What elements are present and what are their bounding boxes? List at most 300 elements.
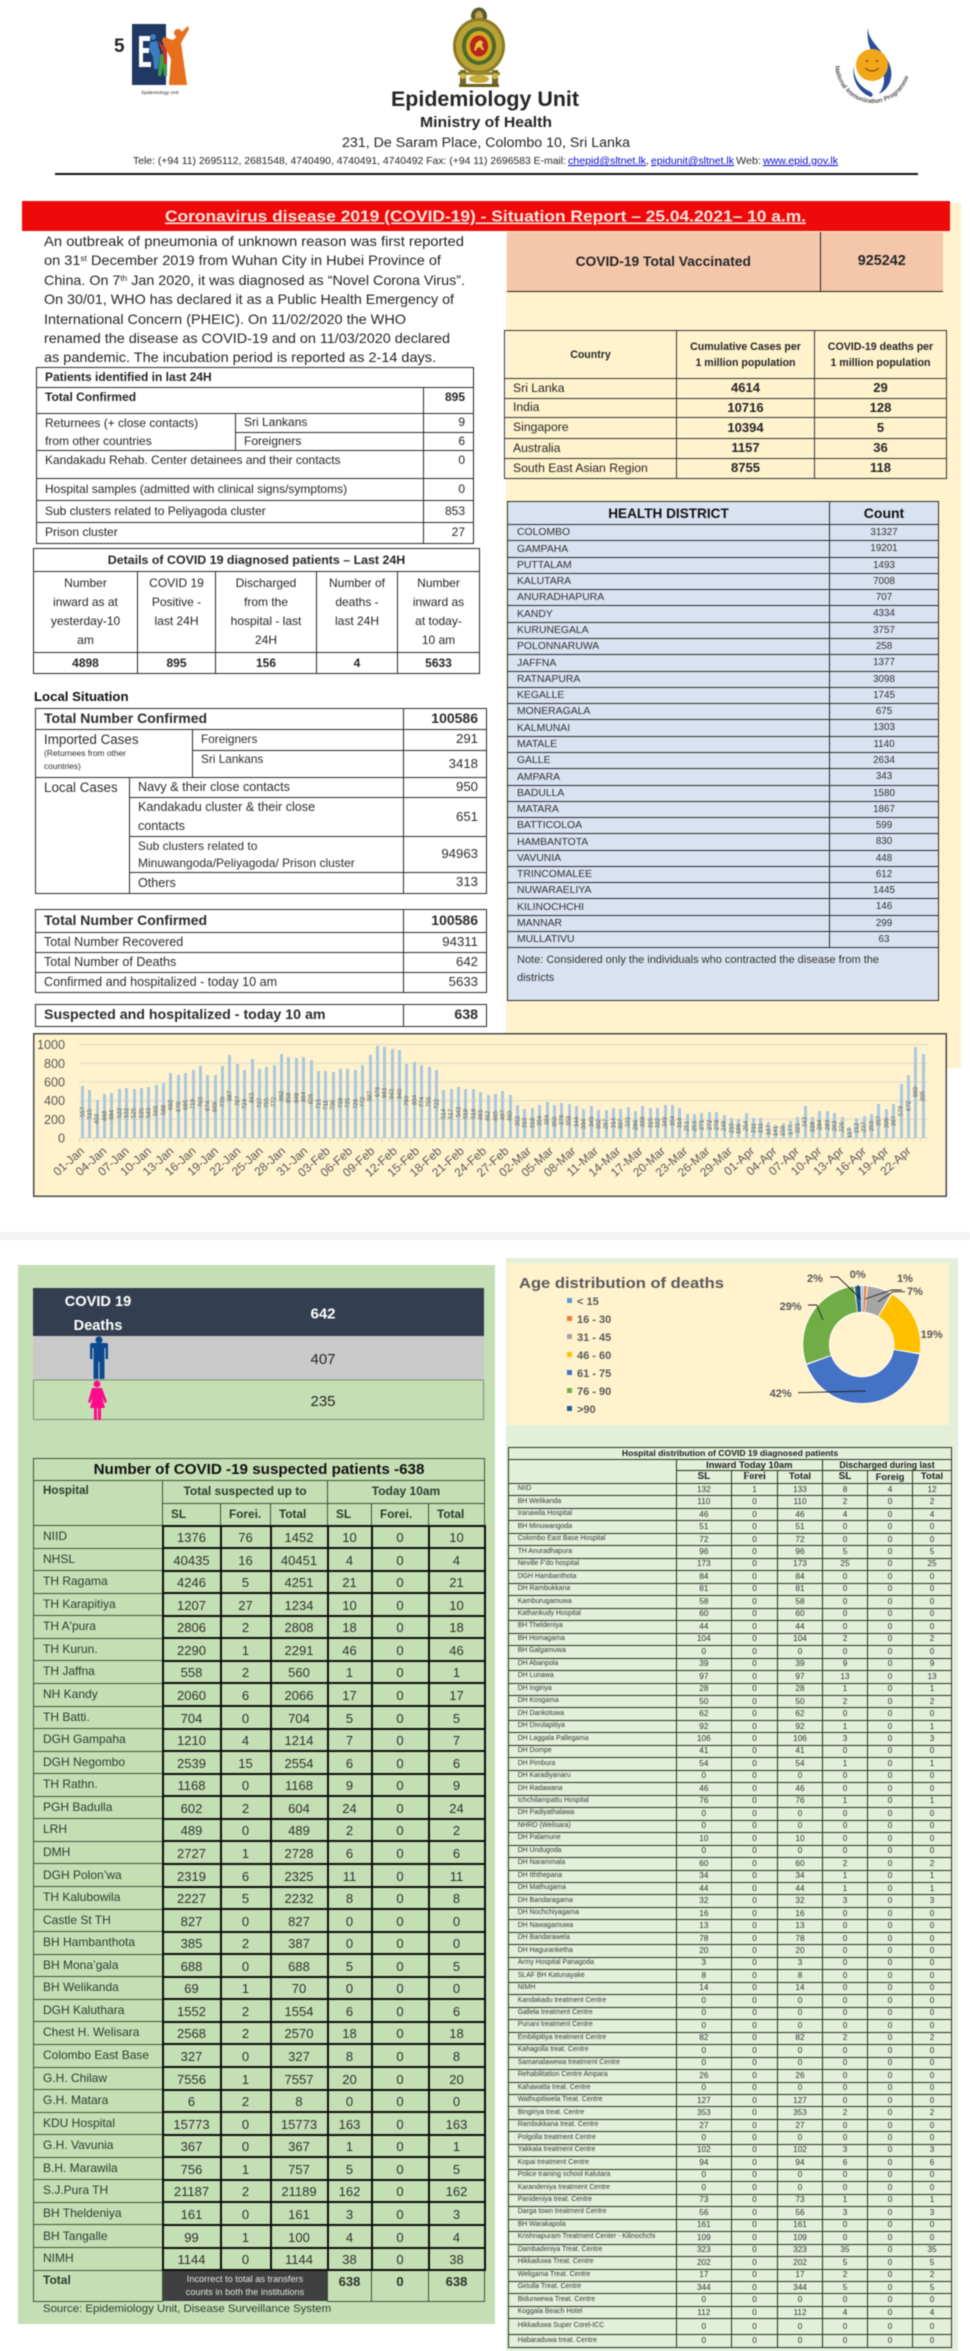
table: country comparison per million: 5 xyxy=(877,420,884,435)
table: hospital distribution of diagnosed patients: 13 xyxy=(699,1921,708,1930)
table: hospital distribution of diagnosed patients: 0 xyxy=(843,1846,847,1855)
table: hospital distribution of diagnosed patients: 0 xyxy=(843,1534,847,1544)
table: hospital distribution of diagnosed patients: 0 xyxy=(702,1647,706,1656)
table: number of suspected patients: NH Kandy xyxy=(43,1687,98,1701)
table: country comparison per million: COVID-19 deaths per xyxy=(828,340,933,352)
table: hospital distribution of diagnosed patients: 44 xyxy=(699,1622,708,1631)
table: number of suspected patients: 40435 xyxy=(173,1553,210,1568)
x axis date labels: 19-Apr xyxy=(855,1144,891,1178)
table: number of suspected patients: 0 xyxy=(242,2252,249,2267)
table: hospital distribution of diagnosed patients: Kamburugamuwa xyxy=(518,1598,572,1604)
table: hospital distribution of diagnosed patients: 2 xyxy=(930,2270,934,2279)
table: number of suspected patients: Forei. xyxy=(229,1507,261,1521)
table: hospital distribution of diagnosed patients: 0 xyxy=(843,1746,847,1755)
table: health district counts: 343 xyxy=(876,771,892,782)
table: local situation breakdown xyxy=(34,707,488,895)
table: hospital distribution of diagnosed patients: SL xyxy=(839,1471,851,1482)
table: local situation breakdown: Total Number Confirmed xyxy=(44,710,207,726)
bars with data labels: 159 xyxy=(780,1125,787,1136)
table: hospital distribution of diagnosed patients: 0 xyxy=(888,2158,892,2167)
table: number of suspected patients: 6 xyxy=(346,2004,353,2019)
table: country comparison per million: 1 million population xyxy=(830,356,931,368)
table: hospital distribution of diagnosed patients: 8 xyxy=(798,1971,802,1980)
table: country comparison per million: 1157 xyxy=(731,440,760,455)
table: hospital distribution of diagnosed patients: 0 xyxy=(843,1597,847,1606)
table: hospital distribution of diagnosed patients: 35 xyxy=(840,2245,850,2254)
table: hospital distribution of diagnosed patients: 0 xyxy=(888,2133,892,2142)
x axis date labels: 09-Feb xyxy=(340,1144,378,1180)
panel: pale green background right column xyxy=(506,1258,958,2351)
table: details of COVID 19 diagnosed patients: yesterday-10 xyxy=(51,614,120,628)
table: hospital distribution of diagnosed patients: 0 xyxy=(752,1672,757,1681)
x axis date labels: 07-Jan xyxy=(95,1144,132,1179)
table: number of suspected patients: 0 xyxy=(242,2139,249,2154)
table: hospital distribution of diagnosed patients: 0 xyxy=(930,2170,934,2179)
table: totals summary: 5633 xyxy=(449,974,478,989)
bars with data labels: 284 xyxy=(817,1119,824,1130)
table: hospital distribution of diagnosed patients: 0 xyxy=(752,1697,757,1706)
table: hospital distribution of diagnosed patients: 0 xyxy=(930,2058,934,2067)
table: number of suspected patients: 163 xyxy=(446,2117,467,2132)
table: totals summary: 100586 xyxy=(431,912,478,928)
table: hospital distribution of diagnosed patients: 0 xyxy=(930,2233,934,2242)
table: hospital distribution of diagnosed patients: 0 xyxy=(888,2245,892,2254)
donut leader lines xyxy=(798,1277,905,1393)
table: hospital distribution of diagnosed patients: 76 xyxy=(795,1796,805,1805)
table: number of suspected patients: 40451 xyxy=(281,1553,317,1568)
bars with data labels: 887 xyxy=(227,1091,234,1101)
table: hospital distribution of diagnosed patients: 2 xyxy=(930,1497,934,1506)
y axis labels xyxy=(37,1038,65,1146)
table: hospital distribution of diagnosed patients: 97 xyxy=(699,1672,708,1681)
table: hospital distribution of diagnosed patients: 102 xyxy=(697,2145,711,2154)
x axis date labels xyxy=(50,1144,914,1180)
table: hospital distribution of diagnosed patients: DH Lunawa xyxy=(518,1672,554,1679)
table: hospital distribution of diagnosed patients: 0 xyxy=(888,1759,892,1768)
table: details of COVID 19 diagnosed patients: 156 xyxy=(256,656,276,670)
heading: Epidemiology Unit: Epidemiology Unit xyxy=(391,88,579,111)
table: hospital distribution of diagnosed patients: 0 xyxy=(888,1834,892,1843)
bars with data labels: 672 xyxy=(905,1101,912,1112)
table: hospital distribution of diagnosed patients: Hikkaduwa Super Corel-ICC xyxy=(518,2322,604,2329)
table: hospital distribution of diagnosed patients: 0 xyxy=(798,2322,802,2331)
table: hospital distribution of diagnosed patients: 0 xyxy=(752,1572,757,1581)
table: hospital distribution of diagnosed patients: 0 xyxy=(843,1834,847,1843)
table: number of suspected patients: 0 xyxy=(242,1778,249,1793)
table: number of suspected patients: 9 xyxy=(346,1778,353,1793)
table: hospital distribution of diagnosed patients: 17 xyxy=(795,2270,805,2279)
bars with data labels: 350 xyxy=(551,1116,558,1127)
table: hospital distribution of diagnosed patients: 1 xyxy=(930,1871,934,1880)
table: hospital distribution of diagnosed patients: Embilipitiya treatment Centre xyxy=(518,2034,606,2041)
bars with data labels: 715 xyxy=(315,1099,322,1110)
x axis date labels: 02-Mar xyxy=(496,1144,534,1180)
bars with data labels: 514 xyxy=(441,1109,448,1119)
table: hospital distribution of diagnosed patients: 110 xyxy=(793,1497,807,1506)
table: hospital distribution of diagnosed patients: 0 xyxy=(930,2046,934,2055)
table: hospital distribution of diagnosed patients: 0 xyxy=(702,2021,706,2030)
table: patients identified in last 24H: 9 xyxy=(458,415,465,429)
x axis date labels: 05-Mar xyxy=(518,1144,556,1180)
table: hospital distribution of diagnosed patients: 0 xyxy=(798,2046,802,2055)
table: hospital distribution of diagnosed patients: 0 xyxy=(888,1896,892,1905)
table: hospital distribution of diagnosed patients: 0 xyxy=(888,2308,892,2317)
table: hospital distribution of diagnosed patients: DGH Hambanthota xyxy=(518,1573,576,1580)
table: health district counts: 612 xyxy=(876,869,892,880)
table: hospital distribution of diagnosed patients: 4 xyxy=(930,2308,934,2317)
text block: outbreak introduction: China. On 7 xyxy=(44,273,118,288)
bars with data labels: 278 xyxy=(713,1120,720,1130)
table: local situation breakdown: 950 xyxy=(456,779,478,794)
table: number of suspected patients: 0 xyxy=(396,1711,404,1726)
table: hospital distribution of diagnosed patients: 0 xyxy=(888,1821,892,1830)
table: hospital distribution of diagnosed patients: 0 xyxy=(752,1622,757,1631)
table: hospital distribution of diagnosed patients: Dambadeniya Treat. Centre xyxy=(518,2246,602,2253)
table: hospital distribution of diagnosed patients: 0 xyxy=(843,1983,847,1992)
table: number of suspected patients xyxy=(32,1457,487,2303)
table: hospital distribution of diagnosed patients: 0 xyxy=(798,2336,802,2345)
table: number of suspected patients: 2 xyxy=(242,2004,249,2019)
icon: male figure xyxy=(90,1336,108,1379)
table: hospital distribution of diagnosed patients: 0 xyxy=(930,1522,934,1531)
table: hospital distribution of diagnosed patients: 44 xyxy=(699,1884,708,1893)
table: local situation breakdown: Minuwangoda/Peliyagoda/ Prison cluster xyxy=(138,856,355,870)
table: number of suspected patients: 0 xyxy=(346,1936,353,1951)
table: number of suspected patients: TH Karapitiya xyxy=(43,1597,116,1611)
table: hospital distribution of diagnosed patients: 5 xyxy=(843,2258,847,2267)
table: hospital distribution of diagnosed patients: Giriulla Treat. Centre xyxy=(518,2283,581,2290)
legend: 61 - 75 xyxy=(577,1368,611,1380)
table: details of COVID 19 diagnosed patients: Number xyxy=(64,576,107,590)
table: hospital distribution of diagnosed patients: 0 xyxy=(930,1647,934,1656)
table: number of suspected patients: 0 xyxy=(396,2094,404,2109)
table: hospital distribution of diagnosed patients: 0 xyxy=(702,1996,706,2005)
y axis labels: 600 xyxy=(44,1076,65,1090)
table: hospital distribution of diagnosed patients: 1 xyxy=(843,1684,847,1693)
table: totals summary: Confirmed and hospitalized - today 10 am xyxy=(44,975,277,989)
table: number of suspected patients: 2 xyxy=(453,1823,460,1838)
table: number of suspected patients: 0 xyxy=(396,1530,404,1545)
table: hospital distribution of diagnosed patients: 0 xyxy=(843,1958,847,1967)
table: number of suspected patients: DGH Polon’wa xyxy=(43,1868,122,1882)
table: number of suspected patients: KDU Hospital xyxy=(43,2116,115,2130)
y axis labels: 400 xyxy=(44,1094,65,1108)
table: number of suspected patients: 2568 xyxy=(177,2026,206,2041)
table: hospital distribution of diagnosed patients: 50 xyxy=(699,1697,708,1706)
x axis date labels: 14-Mar xyxy=(586,1144,623,1180)
table: hospital distribution of diagnosed patients: 3 xyxy=(930,2145,934,2154)
table: hospital distribution of diagnosed patients: 54 xyxy=(795,1759,805,1768)
table: hospital distribution of diagnosed patients: 0 xyxy=(930,2008,934,2017)
table: hospital distribution of diagnosed patients: 0 xyxy=(888,1659,892,1668)
table: hospital distribution of diagnosed patients: 2 xyxy=(843,2108,847,2117)
table: hospital distribution of diagnosed patients: 0 xyxy=(843,2071,847,2080)
heading: age distribution: Age distribution of deaths xyxy=(519,1276,724,1292)
table: health district counts: Count xyxy=(864,504,904,520)
table: number of suspected patients: 7556 xyxy=(177,2072,206,2087)
table: hospital distribution of diagnosed patients: 173 xyxy=(697,1559,711,1568)
table: local situation breakdown: Imported Cases xyxy=(44,732,139,746)
table: totals summary: Total Number of Deaths xyxy=(44,955,176,969)
x axis date labels: 13-Jan xyxy=(140,1144,176,1179)
table: hospital distribution of diagnosed patients: 323 xyxy=(697,2245,711,2254)
table: hospital distribution of diagnosed patients: 0 xyxy=(752,2195,757,2204)
table: hospital distribution of diagnosed patients: DH Karadiyanaru xyxy=(518,1772,571,1779)
table: hospital distribution of diagnosed patients: 344 xyxy=(793,2283,807,2292)
table: number of suspected patients: 0 xyxy=(396,1801,404,1816)
bars with data labels: 352 xyxy=(514,1116,521,1127)
table: hospital distribution of diagnosed patients: Rambukkana treat. Centre xyxy=(518,2121,599,2128)
table: hospital distribution of diagnosed patients: 1 xyxy=(930,1884,934,1893)
table: hospital distribution of diagnosed patients: 26 xyxy=(795,2071,805,2080)
table: hospital distribution of diagnosed patients: 102 xyxy=(793,2145,807,2154)
table: hospital distribution of diagnosed patients: Yakkala treatment Centre xyxy=(518,2146,595,2153)
bars with data labels: 515 xyxy=(87,1109,94,1119)
table: hospital distribution of diagnosed patients: DH Radawana xyxy=(518,1785,563,1792)
bars with data labels: 340 xyxy=(588,1117,595,1127)
bars with data labels: 349 xyxy=(662,1116,669,1127)
table: hospital distribution of diagnosed patients: 0 xyxy=(888,1734,892,1743)
table: health district counts: 146 xyxy=(876,901,892,912)
bars with data labels: 770 xyxy=(219,1097,226,1107)
table: hospital distribution of diagnosed patients: 28 xyxy=(795,1684,805,1693)
panel: COVID-19 total vaccinated xyxy=(507,232,943,292)
table: number of suspected patients: BH Tangalle xyxy=(43,2228,108,2242)
table: number of suspected patients: 385 xyxy=(181,1936,202,1951)
bars with data labels: 264 xyxy=(743,1120,750,1131)
x axis date labels: 04-Apr xyxy=(743,1144,780,1178)
letterhead xyxy=(54,6,919,176)
table: number of suspected patients: 24 xyxy=(449,1801,464,1816)
bars with data labels: 271 xyxy=(699,1120,706,1130)
table: number of suspected patients: 1168 xyxy=(178,1778,205,1793)
bars with data labels: 669 xyxy=(212,1101,219,1112)
table: health district counts: 830 xyxy=(876,836,892,847)
bars with data labels: 578 xyxy=(898,1106,905,1116)
table: hospital distribution of diagnosed patients: 0 xyxy=(752,2046,757,2055)
table: details of COVID 19 diagnosed patients: Number xyxy=(417,576,460,590)
table: hospital distribution of diagnosed patients: 0 xyxy=(752,1746,757,1755)
table: hospital distribution of diagnosed patients: Panideniya treat. Centre xyxy=(518,2196,592,2203)
table: hospital distribution of diagnosed patients: 16 xyxy=(699,1909,708,1918)
table: hospital distribution of diagnosed patients: 0 xyxy=(843,1784,847,1793)
table: number of suspected patients: 2325 xyxy=(285,1868,313,1884)
table: health district counts: NUWARAELIYA xyxy=(517,885,591,896)
table: hospital distribution of diagnosed patients: 8 xyxy=(843,1485,847,1494)
table: hospital distribution of diagnosed patients: 0 xyxy=(930,2220,934,2229)
table: health district counts: 63 xyxy=(879,934,889,945)
table: number of suspected patients: G.H. Matara xyxy=(43,2093,108,2107)
table: health district counts: 3757 xyxy=(873,625,895,636)
table: hospital distribution of diagnosed patients: 54 xyxy=(699,1759,708,1768)
table: hospital distribution of diagnosed patients: 0 xyxy=(930,1709,934,1718)
table: number of suspected patients: 1 xyxy=(242,2230,249,2244)
table: number of suspected patients: 1552 xyxy=(177,2004,206,2019)
bars with data labels: 251 xyxy=(684,1121,691,1131)
table: number of suspected patients: 2291 xyxy=(285,1643,313,1658)
bars with data labels: 943 xyxy=(389,1089,396,1099)
table: hospital distribution of diagnosed patients: 132 xyxy=(697,1485,711,1494)
table: details of COVID 19 diagnosed patients: 895 xyxy=(166,656,187,670)
bars with data labels: 843 xyxy=(249,1093,256,1104)
logo: National Immunization Programme: National Immunization Programme xyxy=(834,65,909,104)
table: health district counts: HEALTH DISTRICT xyxy=(608,506,729,520)
table: number of suspected patients: 2808 xyxy=(285,1620,313,1635)
table: number of suspected patients: 162 xyxy=(446,2184,467,2199)
donut chart xyxy=(816,1299,907,1390)
table: hospital distribution of diagnosed patients: 0 xyxy=(752,2121,757,2130)
table: number of suspected patients: G.H. Chilaw xyxy=(43,2071,107,2085)
bars with data labels: 249 xyxy=(721,1121,728,1131)
table: hospital distribution of diagnosed patients: 0 xyxy=(888,2283,892,2292)
bars with data labels: 117 xyxy=(846,1128,853,1137)
bars with data labels: 543 xyxy=(455,1107,462,1118)
table: details of COVID 19 diagnosed patients: COVID 19 xyxy=(149,576,204,590)
table: hospital distribution of diagnosed patients: Neville F'do hospital xyxy=(518,1560,579,1567)
table: number of suspected patients: Today 10am xyxy=(372,1484,440,1498)
bars with data labels: 692 xyxy=(168,1100,175,1111)
table: hospital distribution of diagnosed patients: 0 xyxy=(752,2096,757,2105)
table: hospital distribution of diagnosed patients: 0 xyxy=(843,1771,847,1780)
donut percentage labels: 7% xyxy=(907,1286,923,1298)
table: number of suspected patients: 2728 xyxy=(285,1846,313,1861)
table: local situation breakdown: Local Cases xyxy=(44,780,118,795)
legend: 76 - 90 xyxy=(577,1386,611,1398)
table: number of suspected patients: 18 xyxy=(342,1620,357,1635)
table: number of suspected patients: 0 xyxy=(396,1575,404,1590)
table: hospital distribution of diagnosed patients: 0 xyxy=(843,1809,847,1818)
bars with data labels: 384 xyxy=(544,1115,551,1125)
legend: >90 xyxy=(577,1404,596,1416)
table: hospital distribution of diagnosed patients: 0 xyxy=(843,2058,847,2067)
bars with data labels: 357 xyxy=(876,1116,883,1126)
table: number of suspected patients: 688 xyxy=(288,1959,310,1974)
table: number of suspected patients: 8 xyxy=(346,1891,353,1906)
table: number of suspected patients: 2060 xyxy=(177,1688,206,1703)
x axis date labels: 01-Jan xyxy=(50,1144,87,1179)
table: number of suspected patients: TH A'pura xyxy=(43,1619,96,1633)
table: number of suspected patients: 11 xyxy=(343,1868,356,1884)
value: male deaths: 407 xyxy=(310,1351,336,1368)
table: number of suspected patients: 15773 xyxy=(281,2117,317,2132)
legend: 31 - 45 xyxy=(577,1332,611,1344)
table: hospital distribution of diagnosed patients: 0 xyxy=(752,1946,757,1955)
table: hospital distribution of diagnosed patients: 0 xyxy=(888,2170,892,2179)
bars with data labels: 302 xyxy=(595,1119,602,1129)
table: hospital distribution of diagnosed patients: 0 xyxy=(843,1709,847,1718)
table: hospital distribution of diagnosed patients: 60 xyxy=(699,1609,708,1618)
table: hospital distribution of diagnosed patients: BH Theldeniya xyxy=(518,1622,563,1629)
bars with data labels: 297 xyxy=(603,1119,610,1129)
table: totals summary: Total Number Recovered xyxy=(44,935,183,949)
bars with data labels: 253 xyxy=(691,1121,698,1131)
table: hospital distribution of diagnosed patients: 6 xyxy=(930,2158,934,2167)
table: number of suspected patients: 6 xyxy=(242,1688,249,1703)
table: patients identified in last 24H: 0 xyxy=(458,453,465,467)
x axis date labels: 21-Feb xyxy=(429,1144,467,1180)
logo: National Immunization Programme xyxy=(834,28,909,104)
table: hospital distribution of diagnosed patients: DH Divulapitiya xyxy=(518,1722,565,1729)
bars with data labels: 848 xyxy=(293,1093,300,1103)
table: country comparison per million: Sri Lanka xyxy=(513,381,564,395)
table: hospital distribution of diagnosed patients: 0 xyxy=(752,1859,757,1868)
table: hospital distribution of diagnosed patients: 0 xyxy=(752,2033,757,2042)
table: details of COVID 19 diagnosed patients: 4 xyxy=(354,656,360,670)
table: hospital distribution of diagnosed patients: 5 xyxy=(930,2258,934,2267)
table: hospital distribution of diagnosed patients: 4 xyxy=(888,1485,892,1494)
table: hospital distribution of diagnosed patients: 78 xyxy=(699,1934,708,1942)
table: hospital distribution of diagnosed patients: 0 xyxy=(888,2322,892,2331)
table: details of COVID 19 diagnosed patients: last 24H xyxy=(154,614,199,628)
table: hospital distribution of diagnosed patients: NIMH xyxy=(518,1984,535,1991)
table: number of suspected patients: 0 xyxy=(396,2139,404,2154)
table: hospital distribution of diagnosed patients: 0 xyxy=(930,2071,934,2080)
table: hospital distribution of diagnosed patients: 3 xyxy=(702,1958,706,1967)
table: local situation breakdown: contacts xyxy=(138,819,185,833)
text: contact line: Web: xyxy=(736,156,761,167)
table: hospital distribution of diagnosed patients: 127 xyxy=(793,2096,807,2105)
table: hospital distribution of diagnosed patients: 12 xyxy=(927,1485,937,1494)
table: hospital distribution of diagnosed patients: 9 xyxy=(843,1659,847,1668)
table: hospital distribution of diagnosed patients: 2 xyxy=(843,2270,847,2279)
table: number of suspected patients: 5 xyxy=(242,1891,249,1906)
bars with data labels: 497 xyxy=(500,1109,507,1120)
bars with data labels: 263 xyxy=(831,1120,838,1131)
table: hospital distribution of diagnosed patients: 0 xyxy=(888,1746,892,1755)
bars with data labels: 532 xyxy=(123,1108,130,1118)
table: hospital distribution of diagnosed patients: 0 xyxy=(752,1983,757,1992)
table: number of suspected patients: 1 xyxy=(242,2072,249,2087)
table: hospital distribution of diagnosed patients: 106 xyxy=(793,1734,807,1743)
table: number of suspected patients: 4246 xyxy=(177,1575,206,1590)
table: hospital distribution of diagnosed patients: 0 xyxy=(752,2336,757,2345)
table: hospital distribution of diagnosed patients: 323 xyxy=(793,2245,807,2254)
table: number of suspected patients: 0 xyxy=(396,2026,404,2041)
table: hospital distribution of diagnosed patients: 28 xyxy=(699,1684,708,1693)
table: hospital distribution of diagnosed patients: 0 xyxy=(752,2145,757,2154)
table: hospital distribution of diagnosed patients: Ichchilampattu Hospital xyxy=(518,1797,589,1804)
table: hospital distribution of diagnosed patients: 0 xyxy=(930,1809,934,1818)
table: number of suspected patients: 16 xyxy=(238,1553,253,1568)
table: hospital distribution of diagnosed patients: 0 xyxy=(843,1622,847,1631)
table: details of COVID 19 diagnosed patients: 24H xyxy=(255,633,277,647)
table: number of suspected patients: 604 xyxy=(288,1801,310,1816)
table: hospital distribution of diagnosed patients: 0 xyxy=(843,1821,847,1830)
table: hospital distribution of diagnosed patients: 0 xyxy=(702,1846,706,1855)
panel: COVID-19 total vaccinated: COVID-19 Total Vaccinated xyxy=(576,254,751,269)
text block: outbreak introduction: st xyxy=(80,254,88,263)
table: hospital distribution of diagnosed patients: 0 xyxy=(752,1896,757,1905)
table: hospital distribution of diagnosed patients: 78 xyxy=(795,1934,805,1942)
bars with data labels: 722 xyxy=(433,1099,440,1109)
bars with data labels: 522 xyxy=(116,1108,123,1119)
table: health district counts: 4334 xyxy=(873,608,895,619)
table: hospital distribution of diagnosed patients: DH Palamune xyxy=(518,1834,561,1841)
table: hospital distribution of diagnosed patients: 161 xyxy=(793,2220,807,2229)
text: address: 231, De Saram Place, Colombo 10, Sri Lanka xyxy=(342,135,630,151)
table: health district counts: 1377 xyxy=(873,657,895,668)
table: hospital distribution of diagnosed patients: Weligama Treat. Centre xyxy=(518,2271,590,2278)
table: number of suspected patients: 0 xyxy=(242,1959,249,1974)
table: number of suspected patients: 2066 xyxy=(285,1688,313,1703)
heading: COVID 19 Deaths: COVID 19 xyxy=(65,1294,131,1310)
table: hospital distribution of diagnosed patients: 81 xyxy=(699,1584,708,1593)
x axis date labels: 19-Jan xyxy=(184,1144,221,1179)
panel: age distribution of deaths xyxy=(506,1262,950,1426)
table: hospital distribution of diagnosed patients: 0 xyxy=(702,1821,706,1830)
table: number of suspected patients: BH Hambanthota xyxy=(43,1935,135,1949)
table: number of suspected patients: 5 xyxy=(346,1959,353,1974)
